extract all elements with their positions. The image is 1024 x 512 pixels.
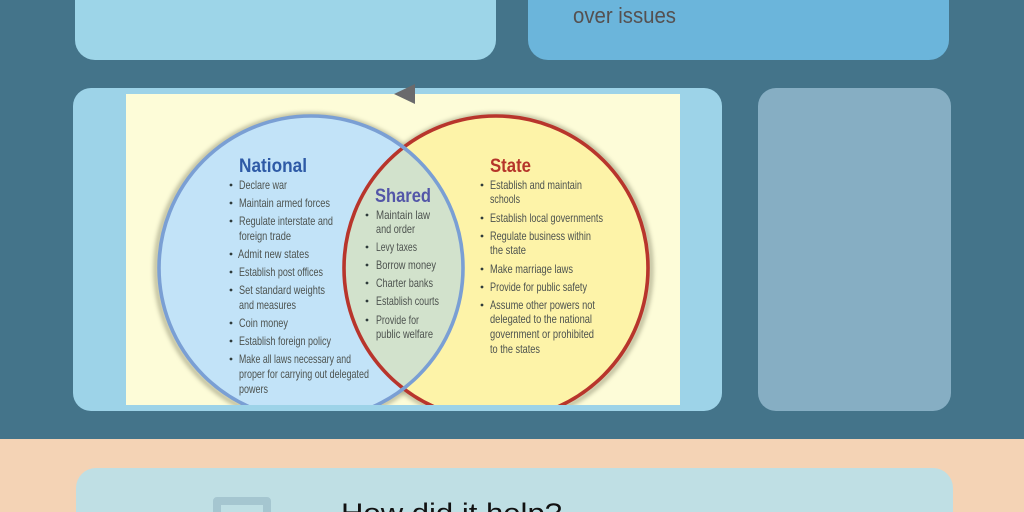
shared list: Provide for [376, 313, 419, 327]
shared list: Charter banks [376, 276, 433, 290]
state list: Make marriage laws [490, 262, 573, 276]
national list: Set standard weights [239, 283, 325, 297]
state list: schools [490, 192, 520, 206]
shared list: Shared [375, 186, 431, 207]
state list: government or prohibited [490, 327, 594, 341]
shared list: public welfare [376, 327, 433, 341]
national list: Regulate interstate and [239, 214, 333, 228]
national list: Make all laws necessary and [239, 352, 351, 366]
arrow: grey pointer [394, 84, 415, 104]
national list: Maintain armed forces [239, 196, 330, 210]
shared list [366, 186, 439, 341]
shared overlap [346, 150, 462, 386]
state list: the state [490, 243, 526, 257]
state ring [344, 116, 648, 420]
shared list: Levy taxes [376, 240, 417, 254]
state list: delegated to the national [490, 312, 592, 326]
national list: foreign trade [239, 229, 291, 243]
national list: National [239, 156, 307, 177]
shared list: Establish courts [376, 294, 439, 308]
panel: bottom peach band [0, 439, 1024, 512]
national list: Coin money [239, 316, 288, 330]
state list: Establish local governments [490, 211, 603, 225]
shared list: and order [376, 222, 415, 236]
state list: to the states [490, 342, 540, 356]
panel: venn diagram card [73, 88, 722, 423]
panel: how did it help card [76, 468, 953, 512]
state list: Establish and maintain [490, 178, 582, 192]
national list: Admit new states [238, 247, 309, 261]
national list: powers [239, 382, 268, 396]
state list: Assume other powers not [490, 298, 596, 312]
state list [481, 156, 603, 356]
national list: Establish post offices [239, 265, 323, 279]
national list [230, 156, 369, 396]
state list: Regulate business within [490, 229, 591, 243]
panel: right empty card [758, 88, 951, 411]
state list: Provide for public safety [490, 280, 587, 294]
shared list: Borrow money [376, 258, 436, 272]
state circle [406, 118, 646, 405]
text: over issues: over issues [573, 3, 676, 28]
icon: document outline [217, 501, 267, 512]
circle shadows [156, 115, 651, 423]
national list: Declare war [239, 178, 287, 192]
state list: State [490, 156, 531, 177]
national ring [159, 116, 463, 420]
national list: and measures [239, 298, 296, 312]
shared list: Maintain law [376, 208, 430, 222]
panel: top right card [528, 0, 949, 60]
national list: proper for carrying out delegated [239, 367, 369, 381]
national list: Establish foreign policy [239, 334, 331, 348]
national circle [160, 118, 400, 405]
panel: top left card [75, 0, 496, 60]
image: venn diagram of national, shared and state powers [126, 94, 680, 423]
